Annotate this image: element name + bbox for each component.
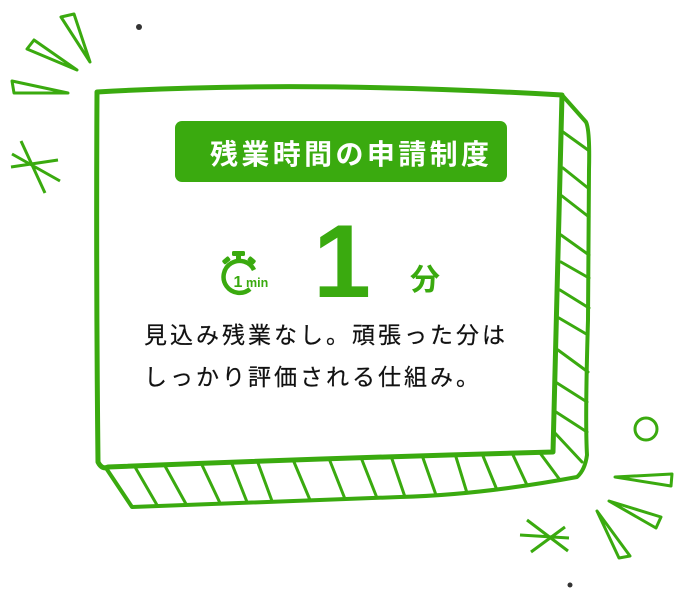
decoration: dots	[136, 24, 572, 588]
decoration: bottom-right bursts	[520, 418, 672, 558]
text block: description	[144, 322, 505, 390]
icon: stopwatch 1min: min	[246, 276, 268, 290]
icon: stopwatch 1min: 1	[234, 274, 243, 291]
text block: description: 見込み残業なし。頑張った分は	[144, 322, 505, 348]
heading badge: 残業時間の申請制度	[210, 139, 492, 170]
decoration: top-left bursts	[11, 14, 90, 193]
number: 1: 1	[313, 204, 371, 320]
text block: description: しっかり評価される仕組み。	[144, 364, 479, 390]
unit: 分: 分	[410, 264, 440, 297]
icon: stopwatch 1min	[222, 251, 268, 293]
heading badge	[175, 121, 507, 182]
panel: 3D card	[97, 87, 589, 507]
